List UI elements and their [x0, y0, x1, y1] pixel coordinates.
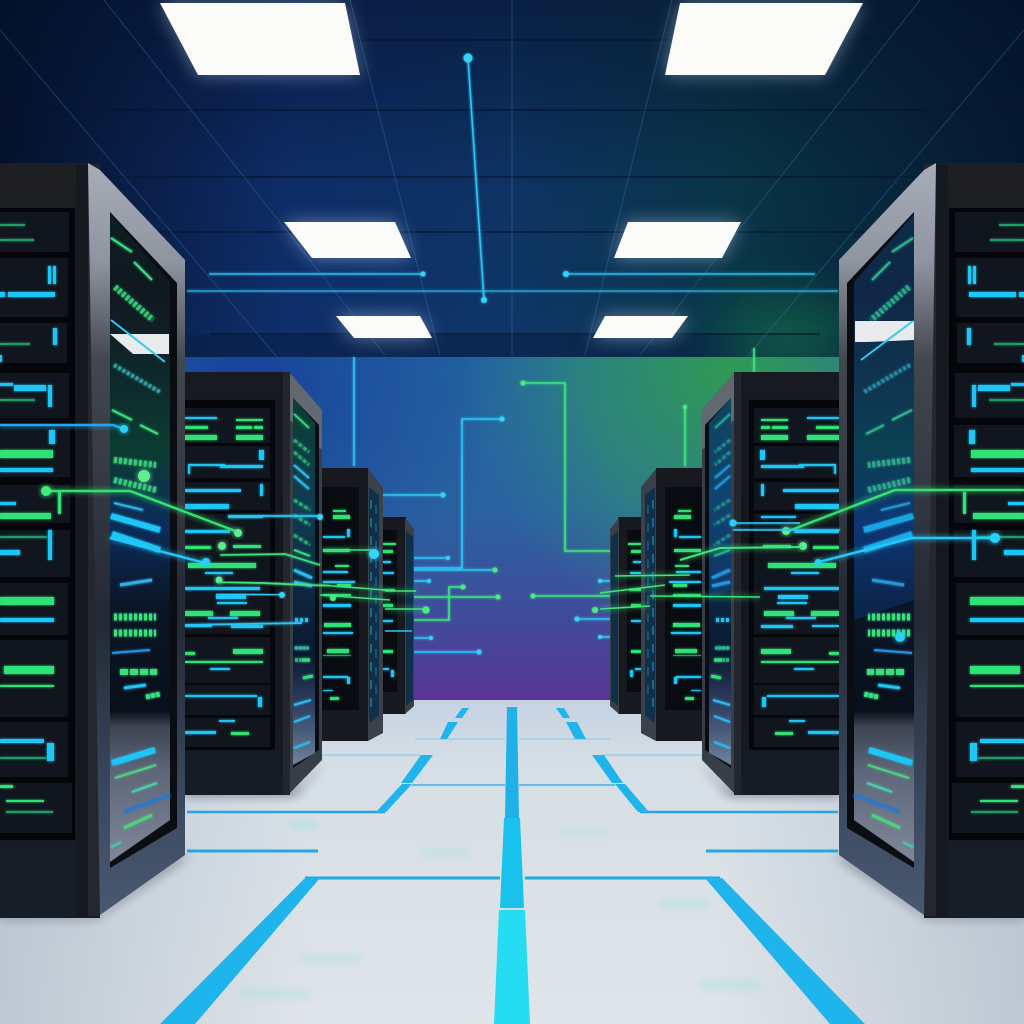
right foreground wires: [592, 490, 1024, 642]
back wall: [180, 357, 844, 700]
ceiling: [0, 0, 1024, 380]
ceiling light panels: [160, 3, 863, 338]
glass reflections: [110, 320, 914, 362]
rack 1 front left: [0, 163, 185, 918]
rack 3: [322, 468, 383, 741]
rack 4 far left: [383, 517, 414, 714]
ceiling network lines: [187, 54, 838, 303]
right glass tint: [709, 214, 914, 620]
rack 1 modules: [0, 212, 72, 833]
floor light lines: [160, 707, 865, 1024]
rack 2 status bars: [185, 417, 264, 735]
left server racks: [0, 163, 414, 918]
rack 2 glass bars: [294, 414, 313, 748]
floor: [0, 700, 1024, 1024]
rack 2: [185, 372, 322, 795]
wall network lines: [354, 348, 754, 654]
rack 1 glass bars: [111, 238, 170, 847]
left foreground wires: [0, 425, 430, 631]
rack shadows: [0, 762, 1024, 918]
right server racks: [610, 163, 1024, 918]
rack 2 modules: [185, 408, 270, 747]
rack 1 status bars: [0, 224, 61, 813]
